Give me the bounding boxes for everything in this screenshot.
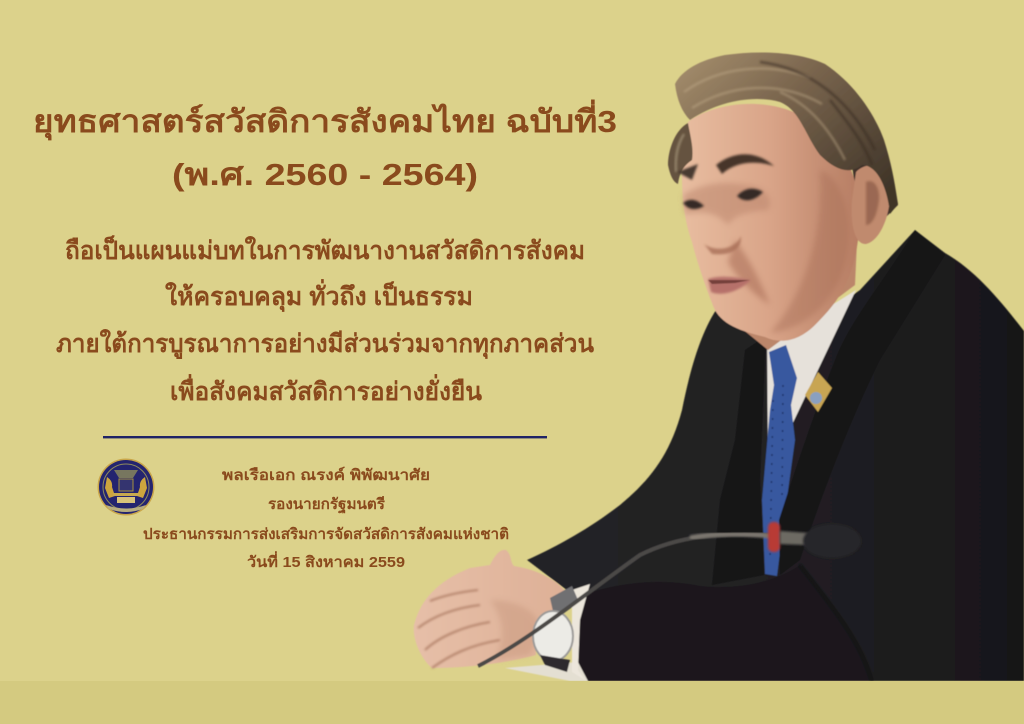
statement text: ให้ครอบคลุม ทั่วถึง เป็นธรรม [165, 279, 473, 313]
title [33, 99, 617, 192]
necktie [762, 345, 797, 576]
title: ยุทธศาสตร์สวัสดิการสังคมไทย ฉบับที่3 [33, 99, 617, 141]
face [682, 104, 860, 341]
hair [675, 52, 898, 214]
shirt collar [767, 290, 856, 470]
icon: government seal [98, 458, 154, 516]
signatory text: รองนายกรัฐมนตรี [268, 496, 386, 514]
left hand [414, 550, 569, 668]
hair back [850, 130, 898, 218]
mouth [708, 277, 751, 294]
signatory text: วันที่ 15 สิงหาคม 2559 [247, 551, 405, 571]
statement text: เพื่อสังคมสวัสดิการอย่างยั่งยืน [170, 374, 482, 406]
neck [725, 220, 858, 350]
eyebrows [677, 164, 698, 180]
hair strands [684, 69, 845, 160]
divider rule [103, 436, 547, 438]
jacket lapel [779, 230, 945, 575]
lower sleeve shading [578, 565, 872, 681]
suit jacket [527, 230, 1024, 681]
signatory text: พลเรือเอก ณรงค์ พิพัฒนาศัย [222, 466, 430, 484]
wrist watch [533, 586, 578, 672]
title: (พ.ศ. 2560 - 2564) [172, 157, 478, 192]
shirt cuff [572, 584, 590, 680]
portrait photo: man in suit [414, 52, 1024, 681]
signatory text: ประธานกรรมการส่งเสริมการจัดสวัสดิการสังคมแห่งชาติ [143, 525, 509, 543]
microphone [478, 522, 861, 666]
eyes [683, 200, 704, 209]
statement text: ถือเป็นแผนแม่บทในการพัฒนางานสวัสดิการสังคม [65, 235, 585, 265]
face shading [770, 170, 848, 333]
side hair [668, 123, 693, 184]
statement text: ภายใต้การบูรณาการอย่างมีส่วนร่วมจากทุกภาคส่วน [56, 328, 594, 360]
statement text [56, 235, 594, 406]
ear [852, 166, 890, 244]
signatory text [143, 466, 509, 571]
bottom band [0, 681, 1024, 724]
nose shading [704, 236, 741, 254]
paper on table [505, 662, 588, 681]
lapel pin [805, 372, 832, 412]
